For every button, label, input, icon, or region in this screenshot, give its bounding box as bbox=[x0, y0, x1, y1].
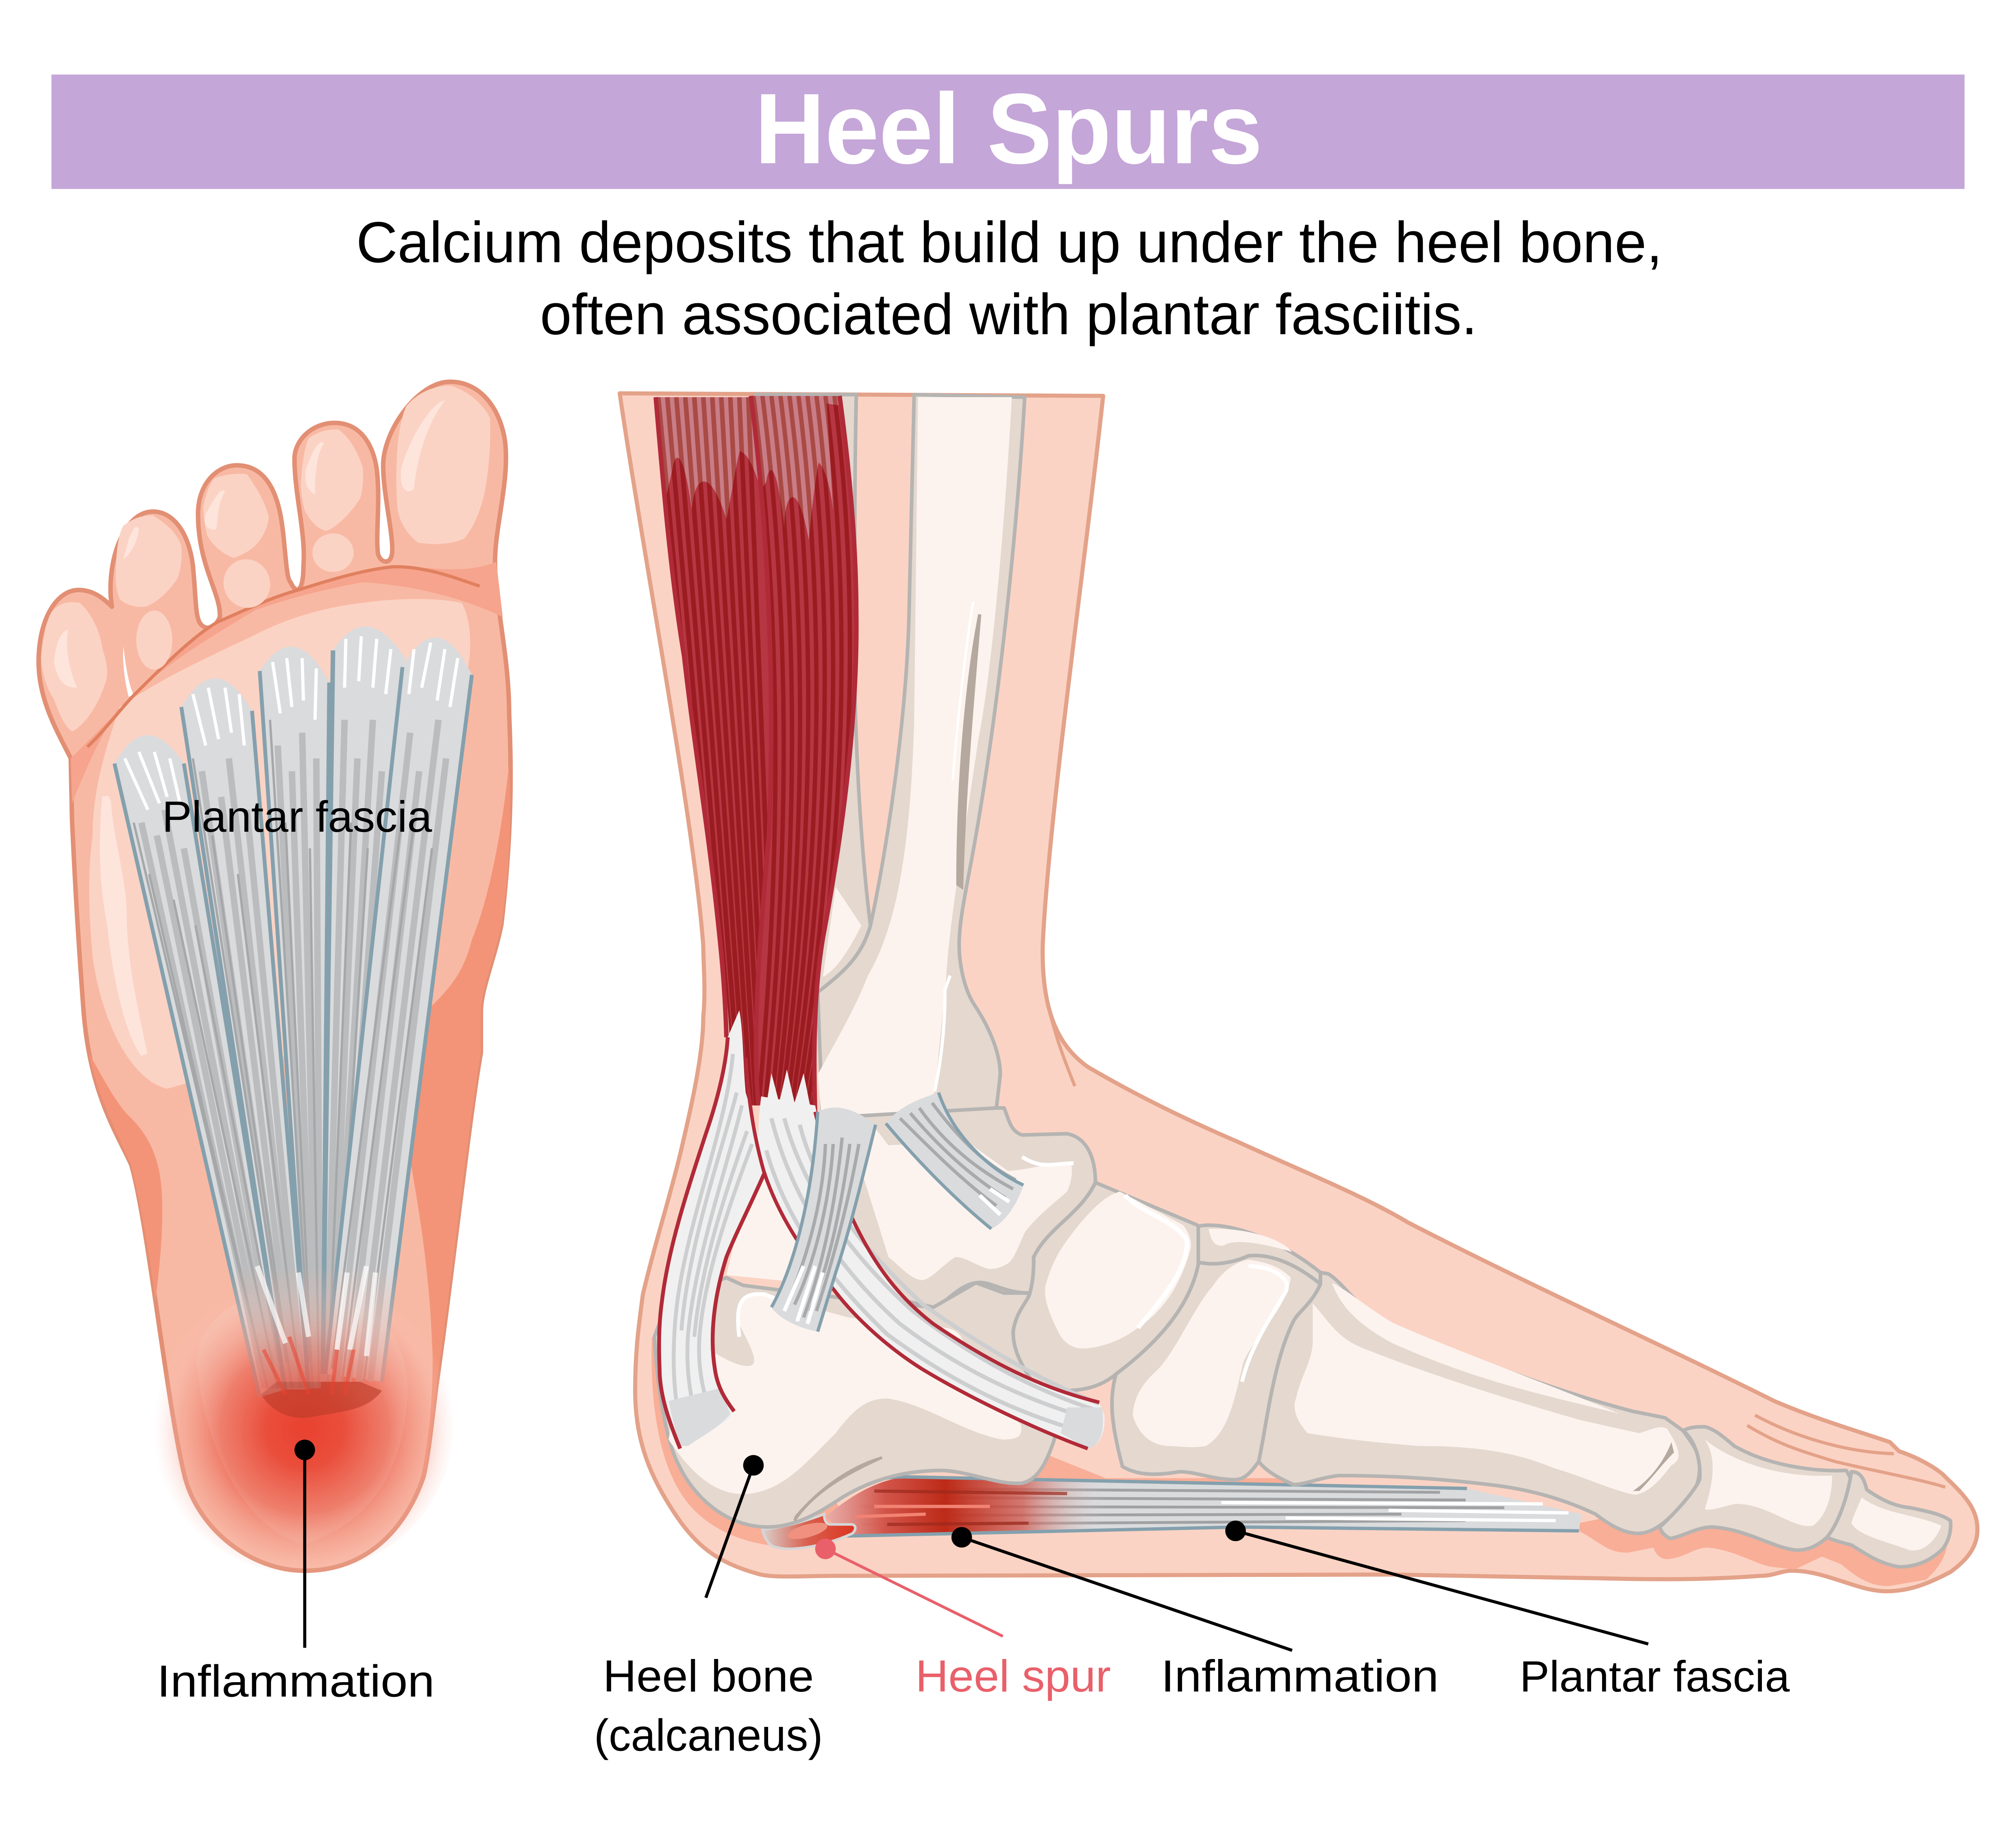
callout: plantar fascia on side view: Plantar fascia bbox=[1520, 1652, 1790, 1701]
callout: heel spur: Heel spur bbox=[915, 1651, 1111, 1701]
inner calf muscle bbox=[746, 386, 868, 1118]
calf muscles bbox=[643, 386, 868, 1118]
shaded side of foot bbox=[403, 763, 510, 1478]
callout: heel bone: Heel bone bbox=[603, 1651, 814, 1701]
muscle outlines bbox=[656, 396, 856, 1112]
retinaculum band over ankle bbox=[886, 1093, 1023, 1229]
midfoot fat pad bbox=[900, 1452, 1299, 1488]
toe pads bbox=[41, 386, 490, 731]
callout: heel bone: (calcaneus) bbox=[594, 1711, 823, 1761]
Achilles side tendon bbox=[659, 1010, 768, 1448]
ball of foot band bbox=[71, 562, 503, 803]
heel fat pad bbox=[651, 1337, 855, 1547]
subtitle: often associated with plantar fasciitis. bbox=[540, 282, 1477, 347]
calcaneus heel bone bbox=[654, 1166, 1062, 1527]
talus bone bbox=[818, 1108, 1095, 1307]
callout: heel spur bbox=[815, 1539, 1111, 1701]
fibula bone bbox=[756, 395, 871, 1002]
callout: inflammation on sole: Inflammation bbox=[157, 1657, 435, 1707]
long tendon to midfoot bbox=[746, 1058, 1105, 1448]
sole of the foot illustration bbox=[39, 382, 511, 1573]
arch highlight bbox=[103, 797, 144, 1054]
subtitle bbox=[356, 210, 1662, 347]
callout: heel bone bbox=[594, 1455, 823, 1761]
metatarsal bone bbox=[1259, 1272, 1700, 1533]
callout: plantar fascia on side view bbox=[1225, 1521, 1790, 1701]
heel pad highlight bbox=[197, 1285, 407, 1544]
distal phalanx bone bbox=[1827, 1472, 1951, 1567]
title banner: Heel Spurs bbox=[755, 73, 1263, 185]
fascia band 4 bbox=[323, 626, 405, 1382]
heel spur bbox=[762, 1514, 856, 1549]
red fibre streaks bbox=[263, 1337, 354, 1395]
fascia band 5 bbox=[325, 637, 472, 1382]
forefoot fat pad bbox=[1579, 1504, 1948, 1586]
shaded heel edge bbox=[89, 1053, 162, 1301]
foot outline bbox=[39, 382, 511, 1571]
fascia band 1 bbox=[114, 735, 285, 1397]
toe highlights bbox=[54, 401, 445, 688]
outer calf muscle bbox=[643, 386, 797, 1118]
white fibre streaks above inflammation bbox=[257, 1266, 375, 1356]
foot skin bbox=[620, 394, 1977, 1591]
tibia bone bbox=[818, 395, 1025, 1144]
inflammation glow bbox=[150, 1275, 454, 1573]
ball of foot light pad bbox=[89, 599, 470, 1089]
callout: inflammation on side view bbox=[951, 1527, 1439, 1701]
retinaculum band behind ankle bbox=[771, 1108, 875, 1332]
toe nail lines bbox=[1747, 1415, 1945, 1487]
fascia band 3 bbox=[260, 647, 329, 1389]
plantar fascia bbox=[823, 1472, 1581, 1542]
toe gap bbox=[123, 646, 134, 697]
title banner bbox=[52, 73, 1964, 189]
subtitle: Calcium deposits that build up under the heel bone, bbox=[356, 210, 1662, 275]
callout: inflammation on sole bbox=[157, 1439, 435, 1707]
cuneiform and cuboid bones bbox=[1112, 1225, 1320, 1480]
callout: plantar fascia on sole: Plantar fascia bbox=[162, 792, 432, 841]
callout: inflammation on side view: Inflammation bbox=[1161, 1651, 1439, 1701]
side view of foot illustration bbox=[620, 386, 1977, 1591]
inflamed fascia root bbox=[261, 1382, 382, 1418]
navicular bone bbox=[1013, 1183, 1202, 1391]
fascia band 2 bbox=[181, 678, 309, 1389]
proximal phalanx bone bbox=[1660, 1427, 1851, 1550]
toe crease bbox=[87, 567, 479, 747]
ankle crease bbox=[1045, 990, 1075, 1086]
plantar fascia bands bbox=[114, 626, 472, 1397]
